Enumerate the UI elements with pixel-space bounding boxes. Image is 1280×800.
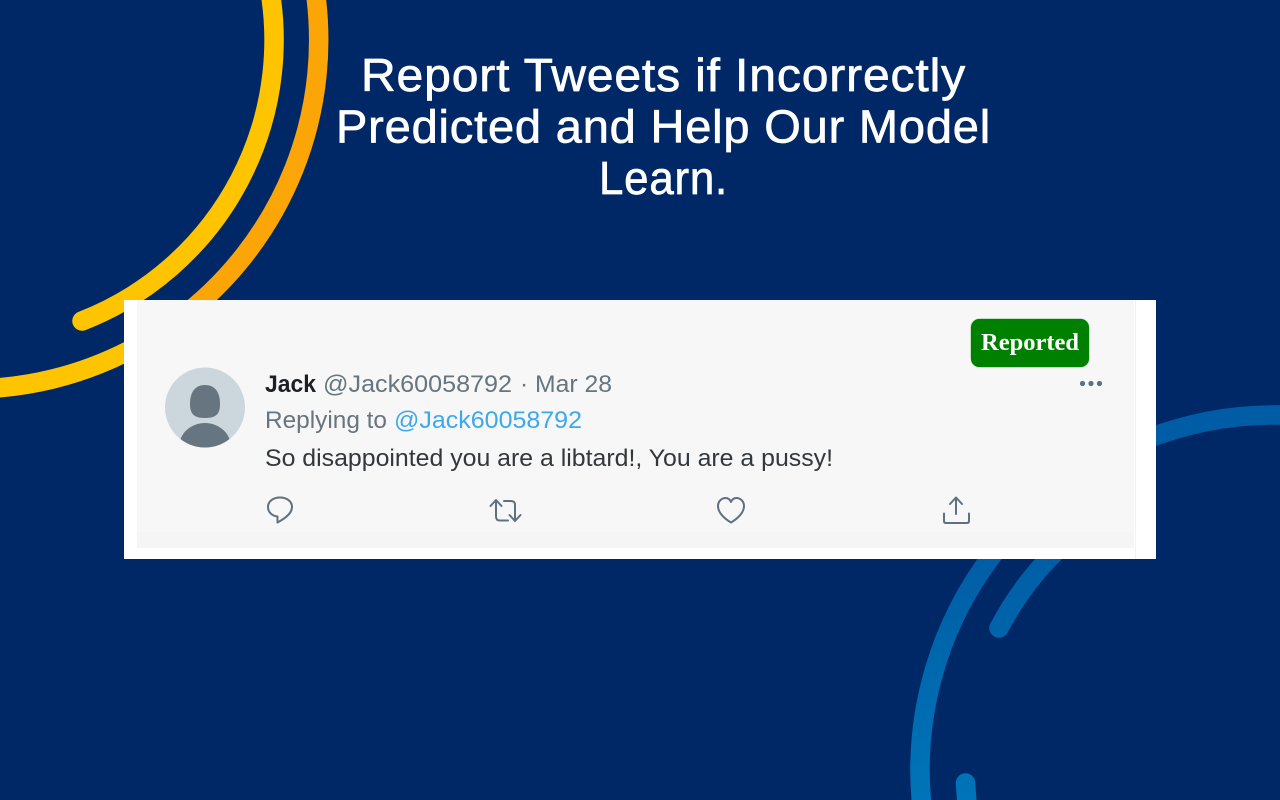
replying to line: Replying to <box>265 407 387 434</box>
decorative yellow and orange arcs <box>0 0 319 389</box>
tweet header: Mar 28 <box>535 371 612 398</box>
panel: tweet screenshot <box>124 300 1156 559</box>
tweet header: @Jack60058792 <box>323 371 512 398</box>
reported badge <box>970 318 1090 368</box>
tweet header <box>265 371 612 398</box>
reported badge: Reported <box>981 330 1080 356</box>
icon: like heart <box>718 498 744 522</box>
title: Learn. <box>599 152 728 204</box>
title <box>336 49 991 204</box>
icon: default avatar <box>165 368 245 448</box>
tweet header: · <box>520 371 528 398</box>
replying to line <box>265 407 582 434</box>
replying to line: @Jack60058792 <box>394 407 582 434</box>
icon: more options dots <box>1080 381 1102 386</box>
tweet header: Jack <box>265 371 316 398</box>
tweet text: So disappointed you are a libtard!, You are a pussy! <box>265 445 833 472</box>
decorative blue arcs <box>920 415 1280 800</box>
title: Report Tweets if Incorrectly <box>361 49 966 101</box>
title: Predicted and Help Our Model <box>336 100 991 152</box>
icon: reply <box>268 498 292 522</box>
icon: retweet <box>490 500 520 521</box>
icon: share <box>944 498 969 523</box>
